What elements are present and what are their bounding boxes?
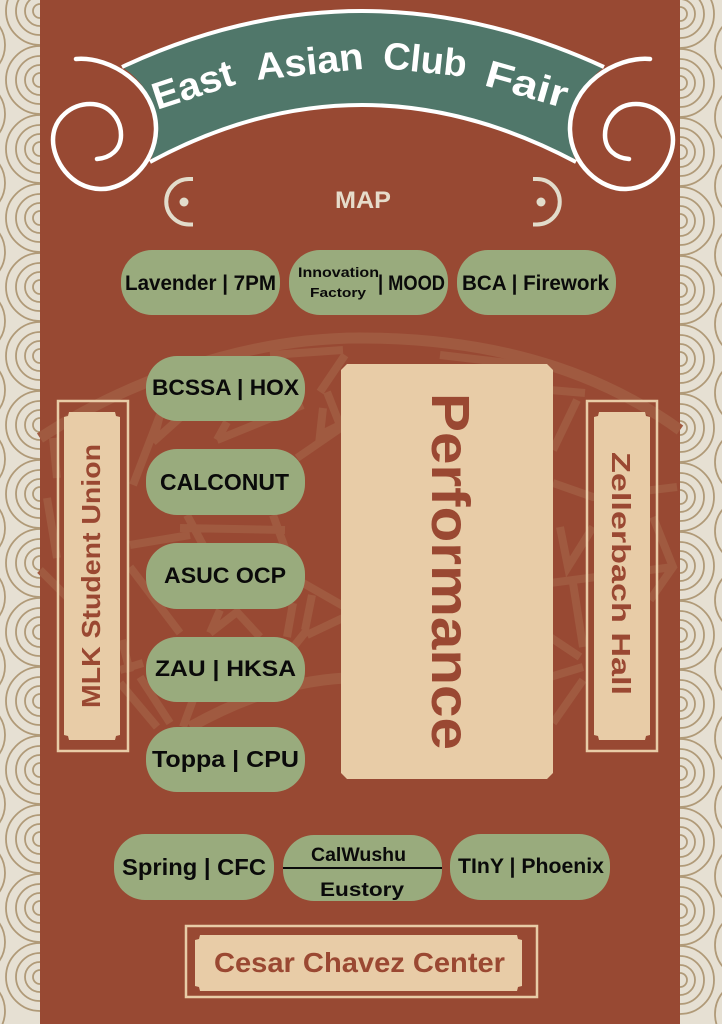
title text: Club <box>381 35 469 86</box>
booth: ZAU | HKSA: ZAU | HKSA <box>155 656 296 681</box>
right wave pattern strip <box>680 0 722 1024</box>
booth: Toppa | CPU <box>146 727 305 792</box>
title text <box>147 35 573 119</box>
title banner <box>53 11 673 189</box>
booth: Lavender | 7PM <box>121 250 280 315</box>
booth: CalWushu / Eustory: Eustory <box>320 880 405 901</box>
booth: Spring | CFC: Spring | CFC <box>122 854 266 880</box>
booth: ZAU | HKSA <box>146 637 305 702</box>
booth: BCSSA | HOX <box>146 356 305 421</box>
booth: Lavender | 7PM: Lavender | 7PM <box>125 272 276 295</box>
faint background lattice emblem <box>40 338 680 727</box>
left wave pattern strip <box>0 0 40 1024</box>
booth: ASUC OCP <box>146 543 305 609</box>
booth: Toppa | CPU: Toppa | CPU <box>152 746 299 772</box>
performance stage panel <box>341 364 553 779</box>
title text: Fair <box>481 53 573 117</box>
banner edges <box>122 11 604 162</box>
booth: ASUC OCP: ASUC OCP <box>164 563 286 588</box>
booth: CALCONUT: CALCONUT <box>160 469 289 495</box>
title text: East <box>147 53 240 119</box>
booth: BCA | Firework <box>457 250 616 315</box>
booth: Innovation Factory | MOOD: | MOOD <box>378 272 445 295</box>
booth: Innovation Factory | MOOD: Innovation <box>298 264 379 280</box>
booth: Spring | CFC <box>114 834 274 900</box>
panel: Zellerbach Hall <box>587 401 657 751</box>
Cesar Chavez label: Cesar Chavez Center <box>214 947 505 978</box>
booth: CALCONUT <box>146 449 305 515</box>
map heading <box>166 179 560 224</box>
panel: Cesar Chavez Center <box>186 926 537 997</box>
booth: TInY | Phoenix <box>450 834 610 900</box>
title text: Asian <box>254 36 365 89</box>
booth: CalWushu / Eustory: CalWushu <box>311 845 406 866</box>
booth: Innovation Factory | MOOD <box>289 250 448 315</box>
left scroll <box>53 59 156 189</box>
top row booths <box>121 250 616 315</box>
right scroll <box>570 59 673 189</box>
map text: MAP <box>335 187 391 214</box>
performance label: Performance <box>420 393 480 750</box>
MLK label: MLK Student Union <box>76 444 106 708</box>
right bracket icon <box>533 179 560 224</box>
bottom row booths <box>114 834 610 901</box>
panel: MLK Student Union <box>58 401 128 751</box>
booth: CalWushu / Eustory <box>283 835 442 901</box>
left bracket icon <box>166 179 193 224</box>
booth: BCSSA | HOX: BCSSA | HOX <box>152 375 299 400</box>
left column booths <box>146 356 305 792</box>
Zellerbach label: Zellerbach Hall <box>606 452 636 695</box>
booth: TInY | Phoenix: TInY | Phoenix <box>458 855 604 878</box>
banner ribbon <box>122 11 604 162</box>
booth: BCA | Firework: BCA | Firework <box>462 272 609 295</box>
booth: Innovation Factory | MOOD: Factory <box>310 285 367 300</box>
